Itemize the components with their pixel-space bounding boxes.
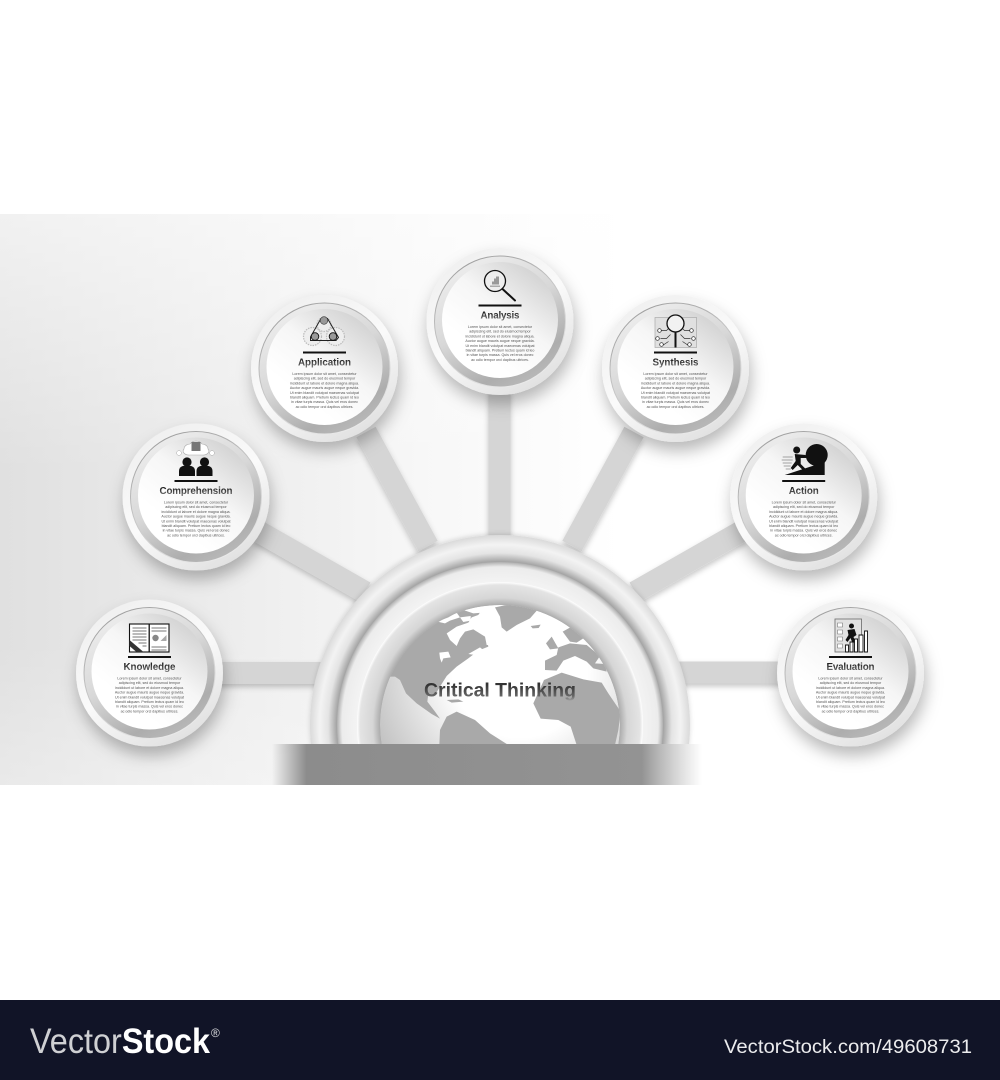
labrador and bay [446,615,488,646]
central semicircle hub [308,533,692,744]
footer url: VectorStock.com/49608731 [724,1037,972,1058]
description: incididunt ut labore et dolore magna aliqua. [161,510,231,514]
description: Auctor augue mauris augue neque gravida. [465,339,535,343]
description [465,325,535,362]
divider [128,656,171,658]
description [769,500,838,537]
description: Lorem ipsum dolor sit amet, consectetur [818,676,883,680]
registered mark: ® [211,1026,220,1040]
description: ac odio tempor orci dapibus ultrices. [822,709,879,713]
icon: person pushing boulder uphill [782,444,828,475]
description: ac odio tempor orci dapibus ultrices. [296,405,353,409]
icon: magnifier over circuit [655,315,696,348]
icon: gears and belt [304,317,344,346]
outer ring [308,533,692,744]
description: adipiscing elit, sed do eiusmod tempor [820,681,882,685]
description: in vitae turpis massa. Quis vel eros donec [770,529,837,533]
divider [829,656,872,658]
description: Lorem ipsum dolor sit amet, consectetur [292,372,357,376]
description [816,676,885,713]
node: Synthesis [602,295,749,442]
heading: Application [298,358,351,368]
divider [174,480,218,482]
description: adipiscing elit, sed do eiusmod tempor [645,377,707,381]
heading: Analysis [480,310,520,322]
caribbean specks [447,699,463,703]
description [161,500,231,537]
heading: Synthesis [652,358,699,368]
description: Ut enim blandit volutpat maecenas volutpat [465,344,535,348]
description: incididunt ut labore et dolore magna aliqua. [465,334,535,338]
description: incididunt ut labore et dolore magna aliqua. [290,381,359,385]
description: blandit aliquam. Pretium lectus quam id leo [290,396,359,400]
description: ac odio tempor orci dapibus ultrices. [775,533,833,537]
description: blandit aliquam. Pretium lectus quam id leo [115,700,184,704]
description: ac odio tempor orci dapibus ultrices. [647,405,704,409]
node: Application [251,295,398,442]
description: blandit aliquam. Pretium lectus quam id leo [769,524,838,528]
description: Ut enim blandit volutpat maecenas volutpat [641,391,710,395]
node: Evaluation [777,600,924,746]
description: blandit aliquam. Pretium lectus quam id leo [641,396,710,400]
footer logo: VectorStock [30,1022,210,1061]
node: Action [730,424,877,570]
node: Comprehension [122,424,270,570]
divider [782,480,825,482]
divider [303,352,346,354]
description: Ut enim blandit volutpat maecenas volutpat [769,519,838,523]
description: Auctor augue mauris augue neque gravida. [115,691,184,695]
middle ring [337,562,663,744]
description: adipiscing elit, sed do eiusmod tempor [773,505,835,509]
description: in vitae turpis massa. Quis vel eros donec [116,705,183,709]
heading: Comprehension [160,486,233,497]
inner ring [358,584,642,744]
footer bar [0,1000,1000,1080]
description: Auctor augue mauris augue neque gravida. [641,386,710,390]
description: Auctor augue mauris augue neque gravida. [290,386,359,390]
globe [380,605,620,744]
node: Knowledge [76,600,223,746]
description: in vitae turpis massa. Quis vel eros donec [467,353,534,357]
description [290,372,359,409]
description: Lorem ipsum dolor sit amet, consectetur [164,500,229,504]
bottom shadow block [272,744,702,785]
description: Ut enim blandit volutpat maecenas volutpat [161,519,231,523]
description: Ut enim blandit volutpat maecenas volutpat [115,695,184,699]
description: blandit aliquam. Pretium lectus quam id leo [466,348,534,352]
description: Ut enim blandit volutpat maecenas volutpat [290,391,359,395]
connector bars [215,390,785,673]
description: Auctor augue mauris augue neque gravida. [816,691,885,695]
europe [545,643,607,672]
description: Auctor augue mauris augue neque gravida. [769,515,838,519]
iceland and uk [531,625,558,649]
description: blandit aliquam. Pretium lectus quam id leo [162,524,230,528]
arctic islands [438,607,482,624]
description: Auctor augue mauris augue neque gravida. [161,515,231,519]
icon: magnifier with chart [484,270,515,300]
description: ac odio tempor orci dapibus ultrices. [471,358,529,362]
greenland [495,605,537,632]
divider [654,352,697,354]
description: incididunt ut labore et dolore magna aliqua. [769,510,838,514]
description: in vitae turpis massa. Quis vel eros donec [163,529,230,533]
description: in vitae turpis massa. Quis vel eros donec [291,400,358,404]
description: Ut enim blandit volutpat maecenas volutpat [816,695,885,699]
divider [478,304,522,306]
description [115,676,184,713]
description: adipiscing elit, sed do eiusmod tempor [119,681,181,685]
description: incididunt ut labore et dolore magna aliqua. [115,686,184,690]
americas [387,607,488,719]
description: adipiscing elit, sed do eiusmod tempor [294,377,356,381]
africa [533,673,621,745]
description: in vitae turpis massa. Quis vel eros donec [642,400,709,404]
heading: Evaluation [826,662,875,673]
great lakes [439,648,482,662]
description: adipiscing elit, sed do eiusmod tempor [165,505,227,509]
title: Critical Thinking [424,680,576,702]
icon: open book [130,624,169,652]
south america [439,712,508,745]
description: Lorem ipsum dolor sit amet, consectetur [772,500,837,504]
description: in vitae turpis massa. Quis vel eros donec [817,705,884,709]
description: ac odio tempor orci dapibus ultrices. [167,533,225,537]
scandinavia [563,627,583,643]
heading: Action [789,486,819,497]
description: incididunt ut labore et dolore magna aliqua. [816,686,885,690]
icon: two people thinking [177,441,214,476]
description: ac odio tempor orci dapibus ultrices. [121,709,178,713]
description [641,372,710,409]
description: incididunt ut labore et dolore magna aliqua. [641,381,710,385]
heading: Knowledge [124,662,176,673]
description: Lorem ipsum dolor sit amet, consectetur [117,676,182,680]
description: adipiscing elit, sed do eiusmod tempor [469,330,531,334]
gray backdrop panel [0,214,1000,785]
icon: checklist with climbing figure [835,619,868,652]
description: blandit aliquam. Pretium lectus quam id leo [816,700,885,704]
description: Lorem ipsum dolor sit amet, consectetur [468,325,533,329]
node: Analysis [426,248,574,395]
description: Lorem ipsum dolor sit amet, consectetur [643,372,708,376]
